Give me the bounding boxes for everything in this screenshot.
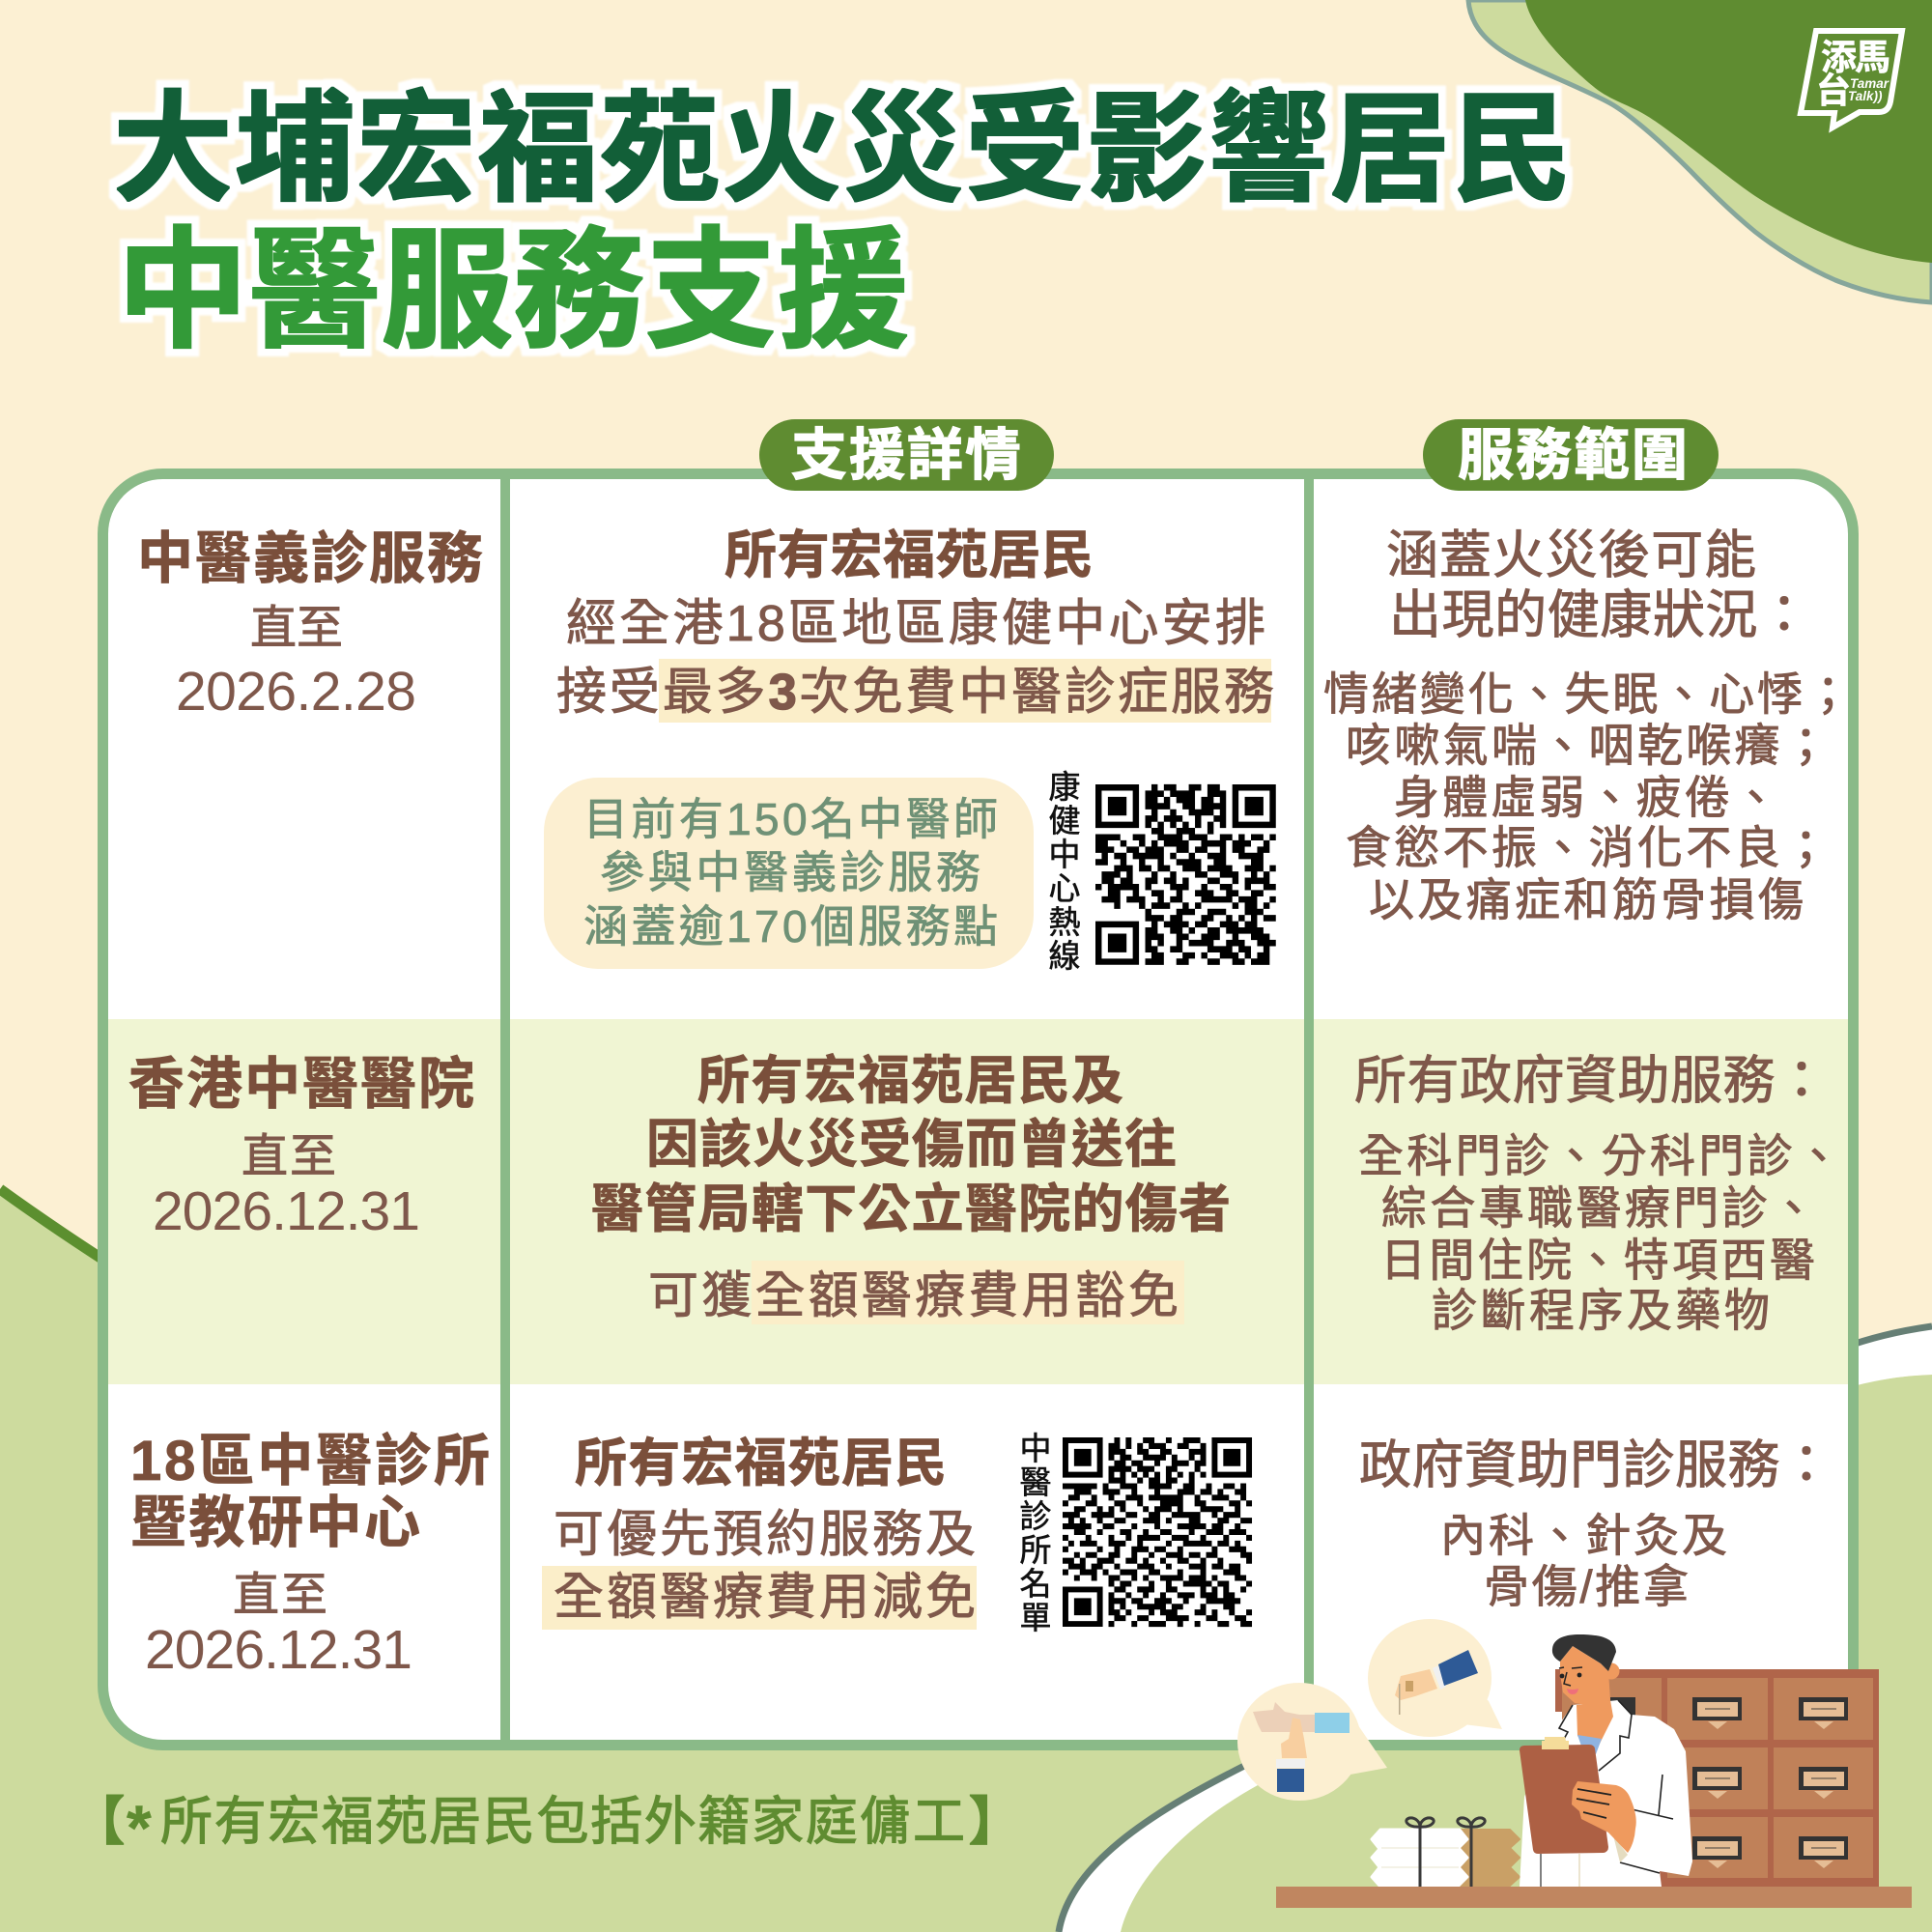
lapels and seams [1559,1700,1673,1873]
hand [1572,1781,1636,1853]
logo: Tamar Talk: Tamar [1850,76,1889,91]
row 3: name: 暨教研中心 [130,1492,420,1554]
row 1: doctors callout: 參與中醫義診服務 [600,847,980,897]
row 1: vertical QR label: 熱 [1049,904,1080,940]
row 3: vertical QR label: 診 [1020,1498,1051,1534]
illustration: medicine cabinet [1555,1669,1879,1888]
footer note: 【 [72,1793,125,1851]
row 1: service scope: 涵蓋火災後可能 [1386,526,1756,584]
row 1: vertical QR label: 康 [1049,769,1080,805]
row 2: service scope: 所有政府資助服務： [1354,1052,1828,1110]
speech bubble: acupuncture [1368,1619,1502,1737]
highlight [659,659,1271,723]
row 1: service scope [1323,526,1851,925]
row 2: name: 直至 [242,1131,336,1182]
row 2 band [106,1019,1851,1384]
row 1: name: 直至 [250,603,343,654]
row 3: vertical QR label: 中 [1020,1431,1051,1466]
row 1: doctors callout: 目前有150名中醫師 [583,794,998,844]
header pill: service scope [1423,419,1719,491]
title line 1: 大埔宏福苑火災受影響居民 [113,83,1572,216]
row 3: details [542,1435,977,1630]
row 1: details: 所有宏福苑居民 [724,526,1094,584]
row 1: service scope: 咳嗽氣喘、咽乾喉癢； [1346,720,1829,771]
row 2: name [128,1053,474,1242]
footer note [72,1792,1021,1863]
row 2: details: 因該火災受傷而曾送往 [646,1116,1177,1174]
corner wave: top right [1468,0,1932,302]
facial features [1577,1673,1581,1677]
row 3: vertical QR label: 醫 [1020,1464,1051,1500]
illustration: towels [1372,1818,1520,1887]
row 3: service scope: 骨傷/推拿 [1484,1561,1689,1612]
row 1: vertical QR label: 健 [1049,803,1080,838]
logo: Tamar Talk: 添馬 [1821,38,1890,77]
row 2: details: 醫管局轄下公立醫院的傷者 [591,1180,1231,1238]
header pill: service scope: 服務範圍 [1458,424,1688,487]
highlight [752,1261,1184,1324]
row 3: details: 全額醫療費用減免 [554,1570,976,1626]
footer note: * [127,1792,152,1863]
speech bubble: pulse diagnosis [1237,1683,1387,1801]
row 2: details: 可獲全額醫療費用豁免 [648,1268,1179,1324]
row 1: details: 接受最多3次免費中醫診症服務 [556,665,1274,721]
illustration: shelf [1276,1887,1912,1908]
row 3: name [130,1430,490,1681]
row 1: doctors callout: 涵蓋逾170個服務點 [583,901,998,952]
row 2: service scope: 日間住院、特項西醫 [1380,1235,1815,1286]
logo: Tamar Talk: Talk)) [1848,89,1883,103]
row 1: details: 經全港18區地區康健中心安排 [566,596,1265,652]
clipboard [1520,1745,1608,1854]
row 1: service scope: 身體虛弱、疲倦、 [1394,772,1778,823]
row 2: details [591,1052,1231,1324]
row 1: service scope: 以及痛症和筋骨損傷 [1369,874,1804,925]
header pill: support details [759,419,1054,491]
QR code: clinic list [1063,1437,1252,1627]
row 3: name: 直至 [233,1570,327,1621]
logo: Tamar Talk [1801,31,1902,128]
row 2: service scope: 診斷程序及藥物 [1432,1285,1770,1336]
row 1: vertical QR label: 線 [1049,938,1080,974]
row 1: service scope: 情緒變化、失眠、心悸； [1323,668,1851,720]
row 1: service scope: 食慾不振、消化不良； [1346,822,1829,873]
row 3: name: 18區中醫診所 [130,1430,490,1492]
logo: Tamar Talk: 台 [1816,71,1851,110]
title line 2: 中醫服務支援 [117,217,909,364]
row 1: service scope: 出現的健康狀況： [1389,586,1810,644]
row 1: name: 中醫義診服務 [137,527,483,590]
row 3: details: 可優先預約服務及 [554,1507,976,1563]
cuff [1613,1835,1628,1862]
hair [1552,1634,1616,1671]
row 3: service scope: 政府資助門診服務： [1359,1436,1833,1494]
footer note: 】 [969,1793,1021,1851]
row 1: name: 2026.2.28 [176,661,416,723]
row 3: vertical QR label: 名 [1020,1566,1051,1602]
row 2: name: 2026.12.31 [153,1180,420,1242]
table panel [102,473,1853,1745]
neck and face [1577,1700,1613,1751]
row 2: service scope: 全科門診、分科門診、 [1358,1130,1841,1181]
row 3: vertical QR label: 所 [1020,1532,1051,1568]
header pill: support details: 支援詳情 [791,424,1021,487]
row 2: service scope [1354,1052,1841,1336]
row 1: doctors callout [544,778,1034,969]
row 3: vertical QR label: 單 [1020,1600,1051,1635]
row 1: details [556,526,1274,723]
row 3: service scope: 內科、針灸及 [1440,1510,1727,1561]
corner wave: bottom green ground [0,1189,1932,1932]
illustration: doctor [1520,1634,1692,1887]
coat [1520,1700,1692,1887]
row 2: service scope: 綜合專職醫療門診、 [1381,1182,1816,1234]
row 2: name: 香港中醫醫院 [128,1053,474,1116]
QR code: health centre hotline [1095,784,1276,965]
row 2: details: 所有宏福苑居民及 [697,1052,1123,1110]
row 3: service scope [1359,1436,1833,1612]
row 3: details: 所有宏福苑居民 [575,1435,947,1492]
highlight [542,1566,977,1630]
footer note: 所有宏福苑居民包括外籍家庭傭工 [160,1793,965,1851]
row 1: name [137,527,483,723]
row 3: name: 2026.12.31 [145,1619,412,1681]
row 1: vertical QR label: 中 [1049,837,1080,872]
row 1: vertical QR label: 心 [1049,870,1080,906]
